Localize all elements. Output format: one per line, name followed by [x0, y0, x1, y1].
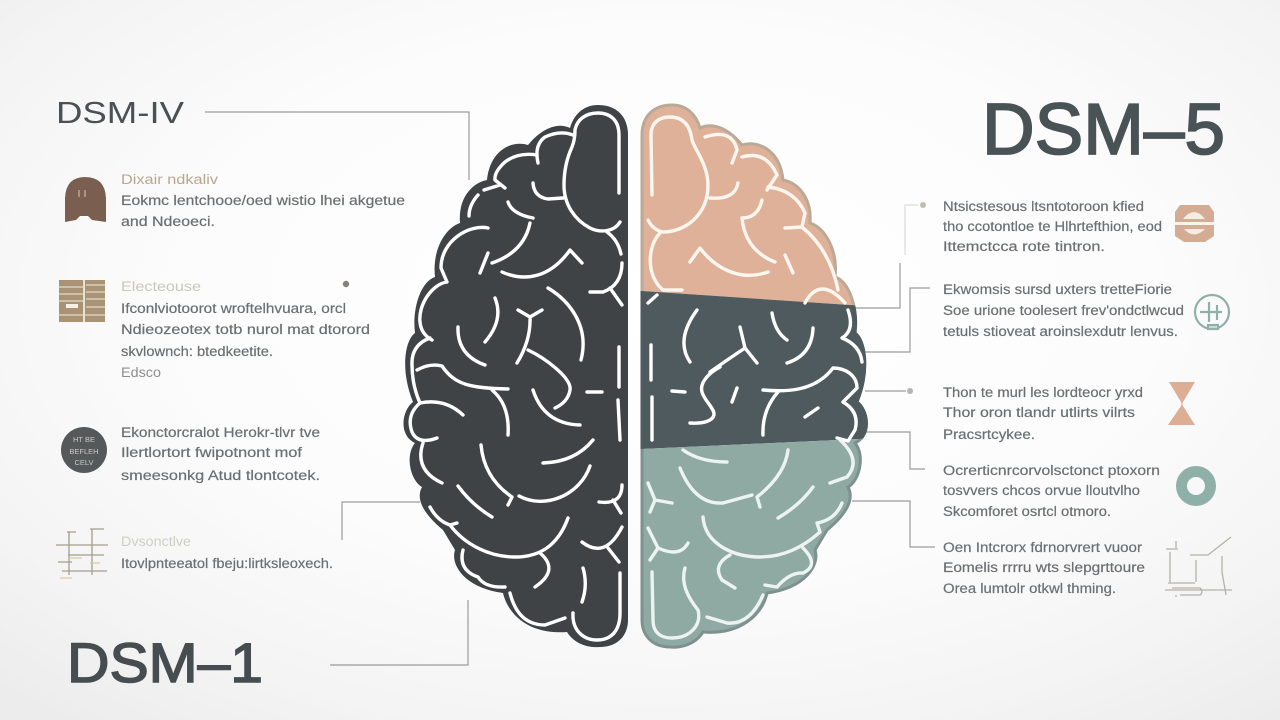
- right hemisphere teal section: [640, 438, 863, 649]
- text block: Electeouse: [121, 279, 201, 294]
- text block: Thon te murl les lordteocr yrxd: [943, 385, 1143, 400]
- text block: and Ndeoeci.: [121, 214, 215, 229]
- text block: tetuls stioveat aroinslexdutr lenvus.: [943, 324, 1178, 339]
- right hemisphere sulci: teal: [648, 440, 853, 638]
- text block: Ifconlviotoorot wroftelhvuara, orcl: [121, 301, 346, 316]
- item: left 1: [65, 172, 405, 229]
- text block: tho ccotontloe te Hlhrtefthion, eod: [943, 219, 1162, 234]
- item: right 1: [943, 199, 1214, 254]
- icon: teal ring: [1182, 472, 1210, 500]
- right hemisphere sulci: slate: [648, 295, 862, 441]
- text block: Dixair ndkaliv: [121, 172, 218, 187]
- title: DSM-5: DSM–5: [982, 90, 1225, 170]
- title: DSM-IV: DSM-IV: [56, 95, 184, 130]
- text block: Pracsrtcykee.: [943, 427, 1035, 442]
- text block: Ekonctorcralot Herokr-tlvr tve: [121, 425, 320, 440]
- item: left 4: [56, 529, 333, 578]
- text block: smeesonkg Atud tlontcotek.: [121, 468, 320, 483]
- text block: Soe urione toolesert frev'ondctlwcud: [943, 303, 1184, 318]
- icon: dark circle: HT BE: [73, 435, 95, 444]
- icon: tan grid: [59, 280, 105, 322]
- text block: [943, 385, 1143, 442]
- text block: [121, 534, 333, 571]
- right hemisphere sulci: peach: [648, 117, 845, 303]
- icon: line chair: [1165, 537, 1232, 597]
- text block: [943, 463, 1160, 519]
- icon: dark circle: BEFLEH: [69, 447, 99, 456]
- text block: Oen Intcrorx fdrnorvrert vuoor: [943, 540, 1143, 555]
- item: right 2: [943, 282, 1229, 339]
- left hemisphere sulci: [410, 113, 622, 640]
- connector lines: [205, 112, 935, 665]
- item: left 3: [61, 425, 320, 483]
- right hemisphere peach section: [640, 104, 856, 306]
- icon: brown arch: [65, 177, 106, 222]
- text block: Ntsicstesous ltsntotoroon kfied: [943, 199, 1144, 214]
- icon: dark circle: [61, 427, 107, 473]
- icon: hourglass: [1168, 382, 1195, 425]
- text block: Dvsonctlve: [121, 534, 191, 549]
- text block: Itovlpnteeatol fbeju:lirtksleoxech.: [121, 556, 333, 571]
- text block: [943, 540, 1145, 596]
- text block: Skcomforet osrtcl otmoro.: [943, 504, 1111, 519]
- item: right 5: [943, 537, 1232, 597]
- text block: Ndieozeotex totb nurol mat dtorord: [121, 322, 370, 337]
- text block: Ilertlortort fwipotnont mof: [121, 445, 302, 460]
- text block: Eomelis rrrru wts slepgrttoure: [943, 560, 1145, 575]
- right hemisphere slate section: [640, 291, 868, 449]
- text block: Orea lumtolr otkwl thming.: [943, 581, 1116, 596]
- item: right 4: [943, 463, 1210, 519]
- brain: left hemisphere: [403, 105, 628, 647]
- text block: [943, 282, 1184, 339]
- item: left 2: [59, 279, 370, 380]
- icon: dark circle: CELV: [74, 458, 94, 467]
- item: right 3: [943, 382, 1195, 442]
- text block: Edsco: [121, 365, 161, 380]
- text block: [943, 199, 1162, 254]
- icon: line grid: [56, 529, 108, 578]
- text block: tosvvers chcos orvue lloutvlho: [943, 483, 1140, 498]
- text block: Ekwomsis sursd uxters tretteFiorie: [943, 282, 1172, 297]
- text block: Ocrerticnrcorvolsctonct ptoxorn: [943, 463, 1160, 478]
- text block: [121, 425, 320, 483]
- icon: peach badge: [1175, 205, 1214, 242]
- text block: [121, 279, 370, 380]
- text block: Thor oron tlandr utlirts vilrts: [943, 405, 1135, 420]
- text block: skvlownch: btedkeetite.: [121, 344, 273, 359]
- brain: right hemisphere: [642, 105, 867, 647]
- text block: [121, 172, 405, 229]
- text block: Eokmc lentchooe/oed wistio lhei akgetue: [121, 193, 405, 208]
- text block: Ittemctcca rote tintron.: [943, 239, 1105, 254]
- icon: teal circle: [1195, 295, 1229, 329]
- title: DSM-1: DSM–1: [67, 631, 263, 694]
